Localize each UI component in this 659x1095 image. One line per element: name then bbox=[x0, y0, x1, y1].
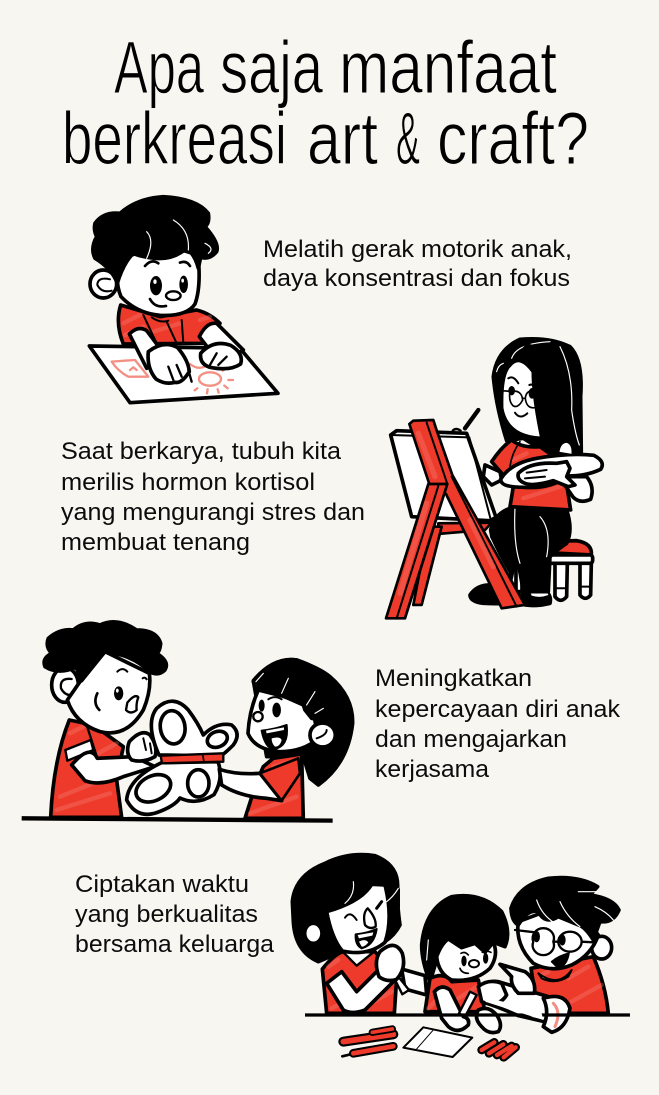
red marker, uncapped bbox=[342, 1046, 393, 1056]
child's arm bbox=[434, 987, 469, 1030]
sheet of paper bbox=[403, 1027, 472, 1057]
far arm bbox=[560, 477, 592, 501]
mother's hair bbox=[292, 855, 400, 962]
girl's head bbox=[248, 690, 318, 752]
girl's hair, back bbox=[253, 660, 353, 785]
text: benefit 4: yang berkualitas bbox=[75, 901, 258, 928]
mother's arm bbox=[327, 968, 395, 1012]
mother's ear bbox=[305, 923, 322, 943]
brush bbox=[465, 410, 478, 428]
stool legs bbox=[516, 555, 593, 600]
illustration: family crafting at table bbox=[292, 855, 630, 1057]
mother's far arm and marker bbox=[402, 969, 427, 995]
shirt bbox=[492, 440, 571, 510]
text: benefit 3: dan mengajarkan bbox=[375, 726, 567, 753]
father's hand pointing bbox=[500, 964, 535, 993]
illustration: two children with butterfly craft bbox=[22, 622, 353, 821]
hand on palette bbox=[518, 462, 575, 487]
mother's face features bbox=[345, 902, 382, 948]
table line bbox=[305, 1010, 630, 1020]
right hand bbox=[201, 344, 241, 369]
trousers bbox=[491, 508, 570, 592]
girl's bangs bbox=[253, 660, 328, 722]
title: saja bbox=[220, 26, 324, 109]
arms bbox=[129, 328, 165, 368]
text: benefit 2: membuat tenang bbox=[61, 529, 250, 556]
ear bbox=[90, 270, 117, 298]
text: benefit 3 bbox=[375, 665, 621, 783]
text: benefit 2: yang mengurangi stres dan bbox=[61, 499, 365, 526]
text: benefit 2: merilis hormon kortisol bbox=[61, 469, 315, 496]
text: benefit 3: kerjasama bbox=[375, 756, 490, 783]
red marker, capped bbox=[343, 1029, 393, 1042]
title bbox=[62, 26, 589, 180]
hair front strand bbox=[512, 343, 557, 442]
title: berkreasi bbox=[62, 97, 287, 180]
girl's arm bbox=[219, 769, 282, 801]
child's marker bbox=[459, 992, 477, 1017]
boy's face features bbox=[95, 669, 147, 712]
text: benefit 1: daya konsentrasi dan fokus bbox=[263, 265, 570, 292]
glasses, eyes, smile bbox=[502, 377, 538, 416]
girl's ear bbox=[310, 723, 335, 747]
shoes bbox=[470, 585, 550, 606]
boy's ear bbox=[52, 668, 78, 702]
father's wrist over table bbox=[485, 998, 543, 1020]
father's head bbox=[518, 902, 598, 969]
illustration: boy drawing on paper bbox=[89, 197, 278, 403]
title: craft? bbox=[437, 97, 589, 180]
text: benefit 4: bersama keluarga bbox=[75, 931, 275, 958]
mother's fist bbox=[376, 945, 404, 981]
small red markers bbox=[482, 1042, 516, 1057]
butterfly craft bbox=[127, 701, 237, 814]
palette bbox=[501, 454, 602, 488]
title: Apa bbox=[114, 26, 205, 109]
mother's face bbox=[327, 884, 389, 953]
ear bbox=[558, 442, 573, 454]
text: benefit 2 bbox=[61, 438, 365, 556]
shirt bbox=[118, 305, 220, 344]
text: benefit 2: Saat berkarya, tubuh kita bbox=[61, 438, 342, 465]
face bbox=[502, 360, 542, 438]
title: art bbox=[307, 97, 378, 180]
father's hair bbox=[511, 878, 619, 940]
paper bbox=[89, 346, 278, 403]
title: manfaat bbox=[339, 26, 557, 109]
canvas bbox=[391, 431, 496, 521]
text: benefit 1: Melatih gerak motorik anak, bbox=[263, 236, 572, 263]
title: & bbox=[396, 97, 420, 180]
hair bbox=[93, 197, 217, 283]
table line bbox=[22, 818, 333, 821]
boy's hair bbox=[44, 622, 166, 681]
mother's shirt bbox=[322, 952, 397, 1013]
collar and shirt placket bbox=[143, 315, 183, 343]
text: benefit 3: Meningkatkan bbox=[375, 665, 532, 692]
girl's shirt bbox=[245, 754, 303, 818]
text: benefit 1 bbox=[263, 236, 572, 292]
boy's shirt bbox=[51, 720, 123, 817]
child's face features bbox=[460, 951, 491, 973]
easel bbox=[386, 420, 525, 618]
face: eyes, brows, nose, smile bbox=[145, 261, 190, 306]
stool seat bbox=[548, 541, 591, 555]
child's red drawing bbox=[112, 360, 233, 393]
father's ear bbox=[592, 936, 612, 959]
hair bbox=[493, 339, 581, 455]
father's arm bbox=[480, 981, 552, 1023]
father's sleeve cuff bbox=[543, 996, 570, 1032]
child's other hand bbox=[476, 1008, 500, 1033]
child's face bbox=[437, 939, 496, 980]
boy's sleeve stripe bbox=[65, 740, 93, 761]
boy's arm bbox=[72, 752, 155, 783]
left hand with pen bbox=[148, 344, 189, 383]
text: benefit 4 bbox=[75, 871, 275, 958]
girl's face features bbox=[253, 697, 287, 749]
arm behind, reaching canvas bbox=[483, 465, 502, 485]
father's glasses and mouth bbox=[515, 928, 593, 968]
child's shirt bbox=[425, 976, 485, 1012]
father's shirt bbox=[531, 957, 608, 1013]
illustration: woman painting at easel bbox=[386, 339, 602, 618]
boy's fist bbox=[128, 733, 156, 761]
child's hair bbox=[422, 896, 508, 982]
text: benefit 4: Ciptakan waktu bbox=[75, 871, 249, 898]
boy's head bbox=[67, 652, 150, 733]
text: benefit 3: kepercayaan diri anak bbox=[375, 696, 621, 723]
head bbox=[117, 243, 199, 315]
